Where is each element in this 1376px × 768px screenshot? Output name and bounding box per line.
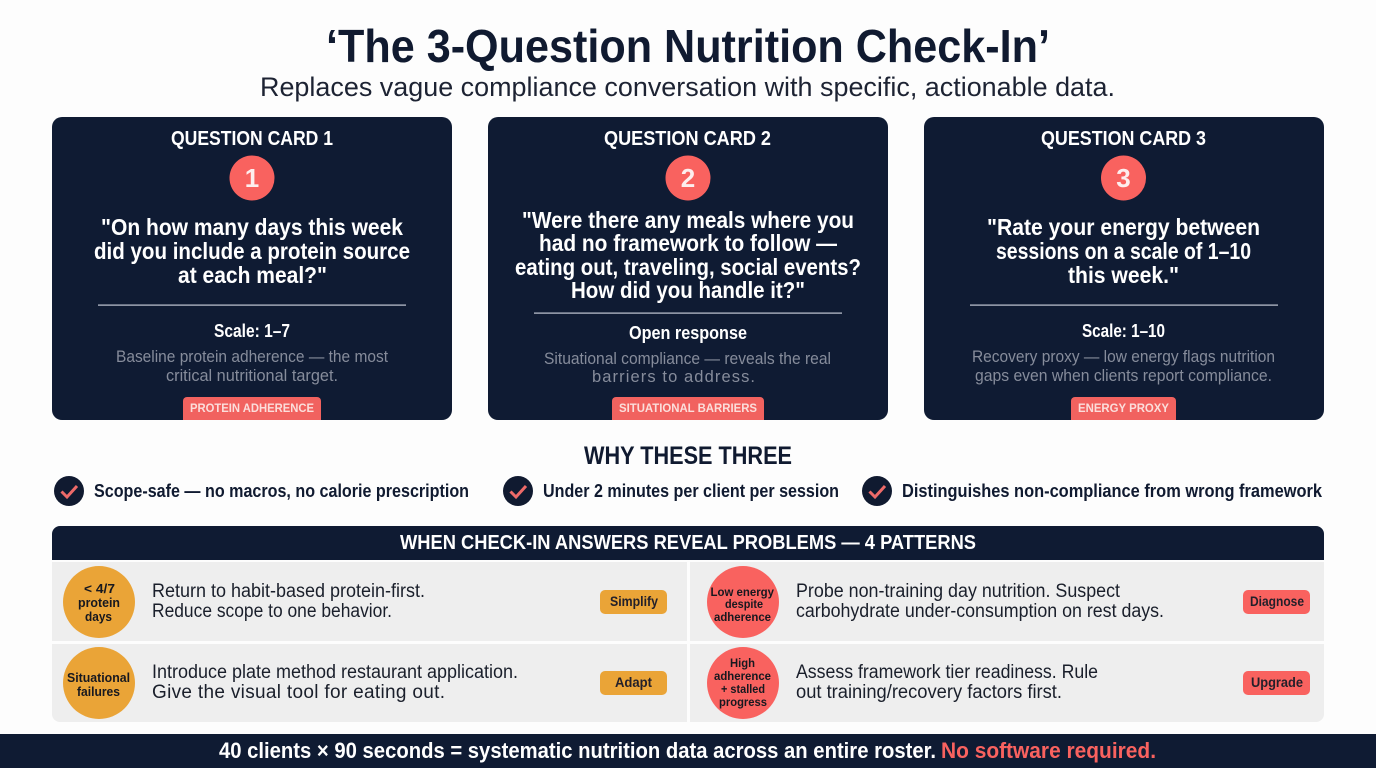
title: ‘The 3-Question Nutrition Check-In’ bbox=[326, 20, 1050, 72]
badge: low energy despite adherence: adherence bbox=[714, 610, 771, 624]
card 2 question bbox=[515, 207, 861, 303]
card 1 heading: QUESTION CARD 1 bbox=[171, 128, 333, 150]
action text: Return to habit-based protein-first. bbox=[152, 581, 425, 602]
card 3 number badge bbox=[1101, 156, 1146, 200]
badge: high adherence stalled progress: + stalled bbox=[721, 682, 765, 696]
panel: question card 3 bbox=[924, 117, 1324, 420]
action text bbox=[152, 581, 425, 622]
panel: question card 1 bbox=[52, 117, 452, 420]
benefit: scope-safe bbox=[54, 476, 469, 506]
action text: Introduce plate method restaurant application. bbox=[152, 662, 518, 683]
badge: low energy despite adherence: Low energy bbox=[710, 585, 774, 599]
pattern: adapt bbox=[52, 644, 687, 722]
card 1 question: "On how many days this week bbox=[101, 214, 403, 240]
card 3 scale: Scale: 1–10 bbox=[1082, 321, 1165, 341]
card 2 description: Situational compliance — reveals the real bbox=[544, 350, 831, 368]
card 2 tag: SITUATIONAL BARRIERS bbox=[619, 401, 757, 415]
footer banner: No software required. bbox=[941, 738, 1156, 763]
card 2 number badge: 2 bbox=[681, 163, 695, 193]
badge: under 4/7 protein days: protein bbox=[78, 595, 120, 610]
card 2 heading: QUESTION CARD 2 bbox=[604, 128, 771, 150]
heading: why these three: WHY THESE THREE bbox=[584, 442, 792, 470]
panel: question card 2 bbox=[488, 117, 888, 420]
card 3 question: "Rate your energy between bbox=[987, 214, 1260, 240]
card 1 description bbox=[116, 348, 388, 385]
card 3 question: sessions on a scale of 1–10 bbox=[996, 238, 1251, 264]
card 2 response type: Open response bbox=[629, 323, 747, 343]
icon: check 3 bbox=[862, 476, 892, 506]
banner: 4 patterns heading bbox=[52, 526, 1324, 560]
card 2 question: How did you handle it?" bbox=[571, 277, 805, 303]
card 1 question bbox=[94, 214, 410, 288]
benefit: distinguishes bbox=[862, 476, 1323, 506]
card 3 description: gaps even when clients report compliance. bbox=[975, 367, 1272, 385]
card 1 number badge: 1 bbox=[245, 163, 259, 193]
badge: under 4/7 protein days: < 4/7 bbox=[84, 581, 115, 596]
card 1 question: did you include a protein source bbox=[94, 238, 410, 264]
badge: low energy despite adherence: despite bbox=[725, 597, 763, 611]
card 3 question: this week." bbox=[1068, 262, 1179, 288]
action text: Give the visual tool for eating out. bbox=[152, 682, 445, 703]
card 2 question: eating out, traveling, social events? bbox=[515, 254, 861, 280]
action text bbox=[796, 581, 1164, 622]
action text: carbohydrate under-consumption on rest days. bbox=[796, 601, 1164, 622]
badge: low energy despite adherence bbox=[707, 566, 779, 638]
card 3 description bbox=[972, 348, 1275, 385]
card 3 tag bbox=[1071, 397, 1176, 420]
card 1 description: critical nutritional target. bbox=[166, 367, 338, 385]
card 1 question: at each meal?" bbox=[178, 262, 327, 288]
card 1 description: Baseline protein adherence — the most bbox=[116, 348, 388, 366]
icon: check 2 bbox=[503, 476, 533, 506]
button: upgrade: Upgrade bbox=[1251, 675, 1303, 690]
benefit: distinguishes: Distinguishes non-compliance from wrong framework bbox=[902, 481, 1323, 501]
badge: high adherence stalled progress: adherence bbox=[714, 669, 771, 683]
button: adapt: Adapt bbox=[615, 675, 652, 690]
card 1 tag: PROTEIN ADHERENCE bbox=[190, 401, 314, 415]
button: diagnose bbox=[1243, 590, 1310, 614]
card 2 question: "Were there any meals where you bbox=[522, 207, 854, 233]
action text: Probe non-training day nutrition. Suspect bbox=[796, 581, 1121, 602]
footer banner bbox=[0, 734, 1376, 768]
subtitle: Replaces vague compliance conversation with specific, actionable data. bbox=[260, 72, 1115, 102]
button: upgrade bbox=[1243, 671, 1310, 695]
action text bbox=[152, 662, 518, 703]
icon: check 1 bbox=[54, 476, 84, 506]
card 2 number badge bbox=[666, 156, 710, 200]
badge: situational failures: Situational bbox=[67, 670, 130, 685]
benefit: under 2 minutes bbox=[503, 476, 839, 506]
button: simplify: Simplify bbox=[610, 594, 658, 609]
badge: under 4/7 protein days bbox=[63, 566, 135, 638]
badge: high adherence stalled progress: High bbox=[730, 656, 755, 670]
button: simplify bbox=[600, 590, 667, 614]
card 3 question bbox=[987, 214, 1260, 288]
badge: high adherence stalled progress bbox=[707, 647, 779, 719]
action text: Reduce scope to one behavior. bbox=[152, 601, 392, 622]
badge: under 4/7 protein days: days bbox=[85, 609, 112, 624]
card 1 number badge bbox=[230, 156, 274, 200]
badge: situational failures: failures bbox=[77, 684, 120, 699]
card 2 tag bbox=[612, 397, 764, 420]
action text: Assess framework tier readiness. Rule bbox=[796, 662, 1098, 683]
badge: high adherence stalled progress: progress bbox=[719, 695, 767, 709]
card 3 heading: QUESTION CARD 3 bbox=[1041, 128, 1206, 150]
pattern: upgrade bbox=[690, 644, 1324, 722]
card 3 description: Recovery proxy — low energy flags nutrition bbox=[972, 348, 1275, 366]
benefit: scope-safe: Scope-safe — no macros, no calorie prescription bbox=[94, 481, 469, 501]
card 3 tag: ENERGY PROXY bbox=[1078, 401, 1169, 415]
pattern: diagnose bbox=[690, 562, 1324, 641]
action text bbox=[796, 662, 1098, 703]
card 2 description bbox=[544, 350, 831, 386]
benefit: under 2 minutes: Under 2 minutes per client per session bbox=[543, 481, 839, 501]
card 1 tag bbox=[183, 397, 321, 420]
badge: situational failures bbox=[63, 647, 135, 719]
footer banner: 40 clients × 90 seconds = systematic nutrition data across an entire roster. bbox=[219, 738, 936, 763]
button: diagnose: Diagnose bbox=[1250, 594, 1304, 609]
banner: 4 patterns heading: WHEN CHECK-IN ANSWERS REVEAL PROBLEMS — 4 PATTERNS bbox=[400, 532, 976, 554]
pattern: simplify bbox=[52, 562, 687, 641]
button: adapt bbox=[600, 671, 667, 695]
card 3 number badge: 3 bbox=[1116, 163, 1131, 193]
action text: out training/recovery factors first. bbox=[796, 682, 1062, 703]
card 2 description: barriers to address. bbox=[592, 368, 755, 386]
card 1 scale: Scale: 1–7 bbox=[214, 321, 290, 341]
card 2 question: had no framework to follow — bbox=[539, 230, 837, 256]
